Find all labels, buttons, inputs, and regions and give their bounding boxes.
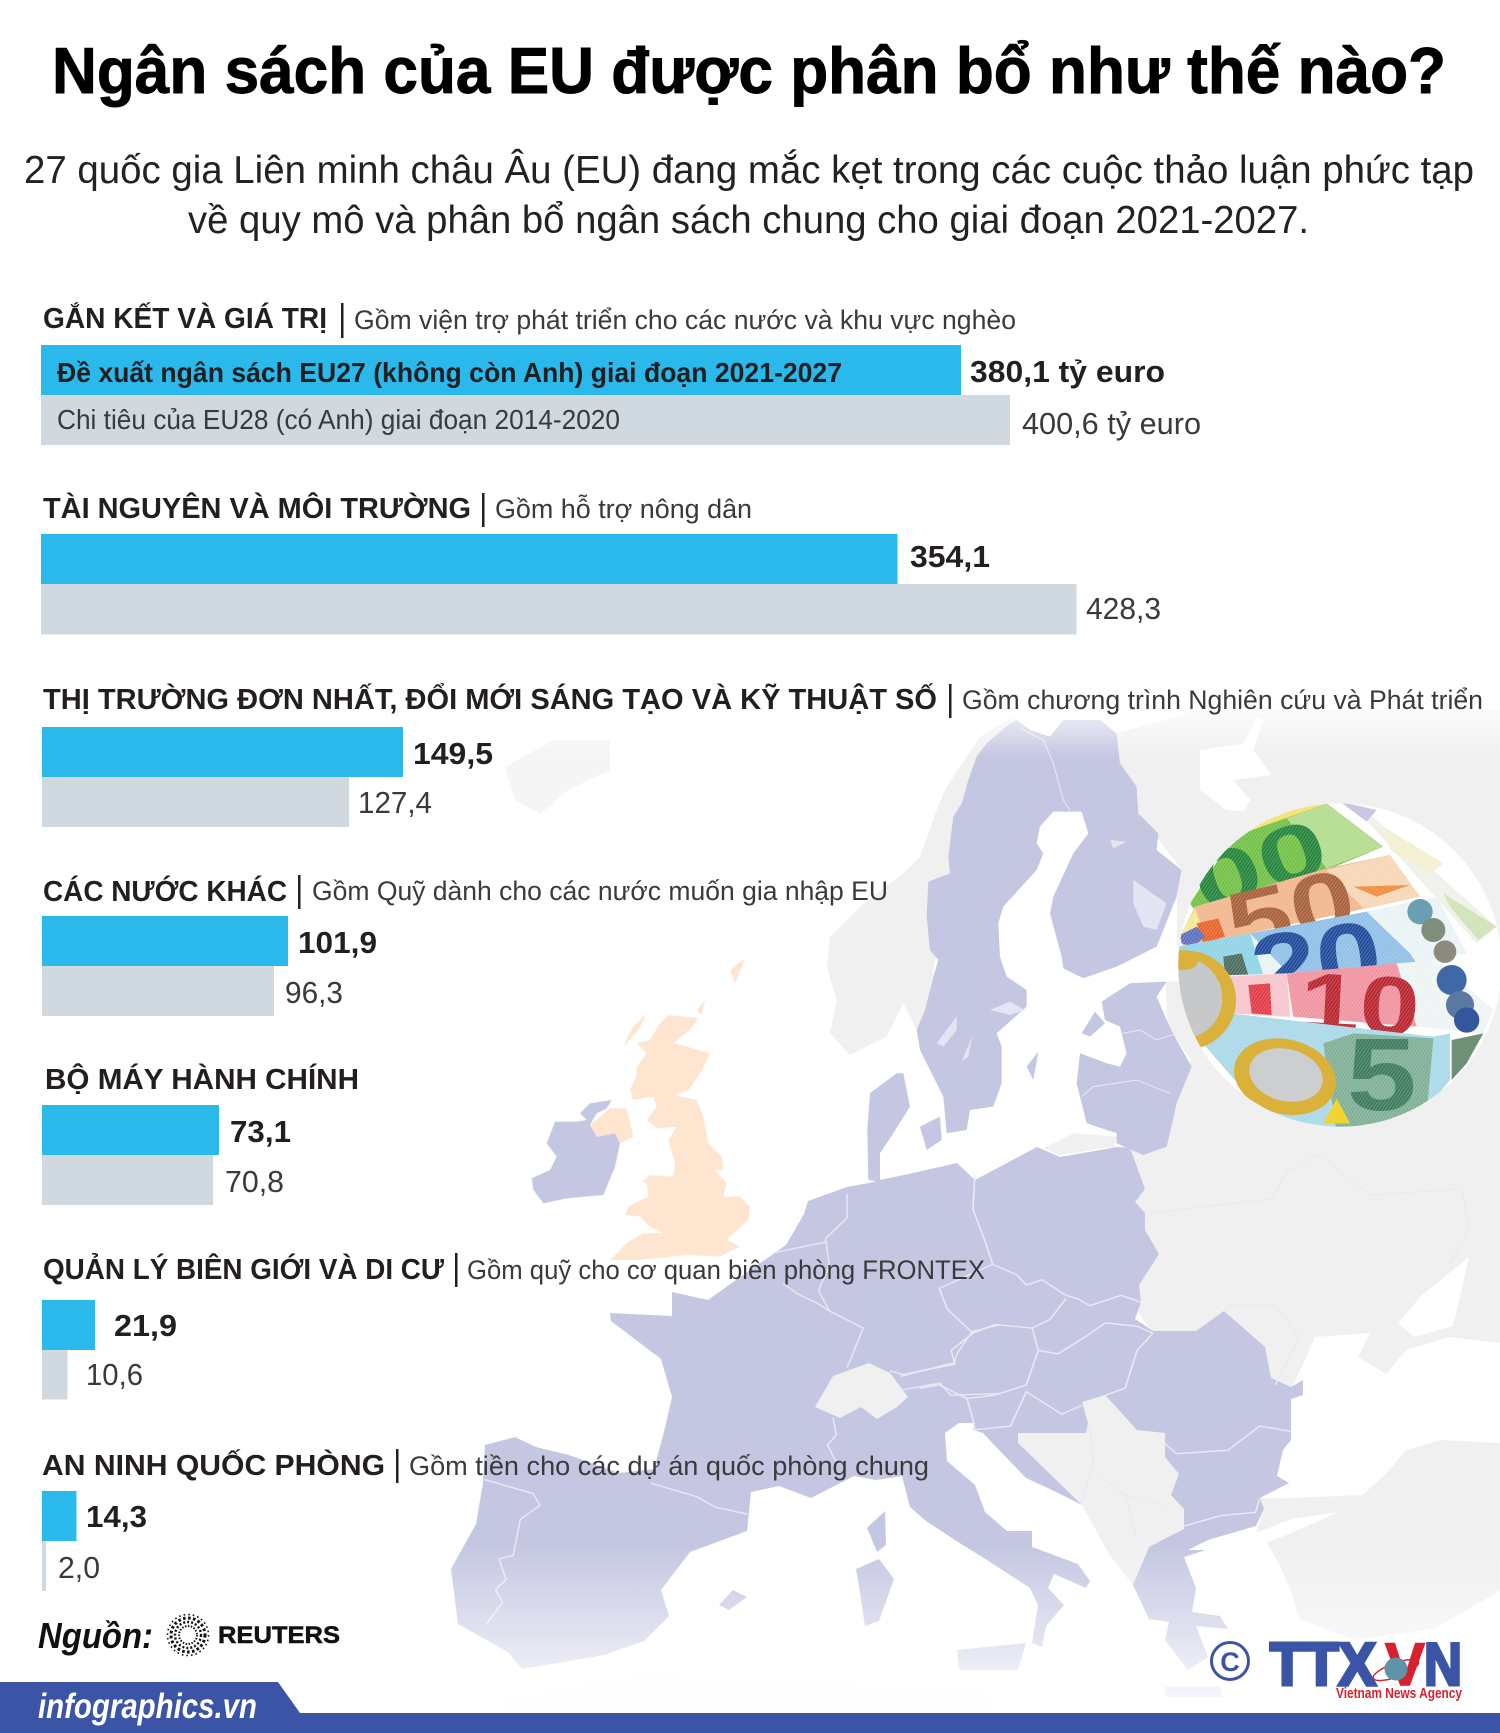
intro text: 27 quốc gia Liên minh châu Âu (EU) đang mắc kẹt trong các cuộc thảo luận phức tạp <box>24 149 1474 192</box>
icon: globe <box>1371 1655 1421 1685</box>
heading: BỘ MÁY HÀNH CHÍNH <box>45 1062 359 1096</box>
description: Gồm Quỹ dành cho các nước muốn gia nhập EU <box>312 876 888 906</box>
bar: EU27 <box>42 1300 95 1350</box>
EU: islands <box>719 1511 1221 1697</box>
bar: EU28 <box>42 966 274 1016</box>
icon: Reuters logo <box>168 1614 208 1656</box>
footer band <box>0 1682 1500 1733</box>
panel: cohesion and values <box>41 301 1201 445</box>
agency name: Vietnam News Agency <box>1336 1686 1462 1702</box>
value: 10,6: 10,6 <box>86 1357 143 1392</box>
legend: EU28: Chi tiêu của EU28 (có Anh) giai đoạn 2014-2020 <box>57 404 620 435</box>
illustration: euro banknotes and coins: 20 <box>1245 900 1388 1025</box>
value: 354,1: 354,1 <box>910 539 990 574</box>
bar: EU28 spending <box>41 395 1010 445</box>
description: Gồm quỹ cho cơ quan biên phòng FRONTEX <box>467 1255 985 1285</box>
description: Gồm tiền cho các dự án quốc phòng chung <box>409 1451 929 1481</box>
bar: EU28 <box>42 777 349 827</box>
EU: Baltic states and Denmark <box>867 982 1192 1182</box>
value: 127,4: 127,4 <box>358 785 432 820</box>
illustration: euro banknotes and coins: 10 <box>1297 955 1422 1054</box>
illustration: euro banknotes and coins: 00 <box>1180 801 1339 931</box>
value: 96,3: 96,3 <box>285 975 343 1010</box>
map of Europe <box>451 710 1500 1713</box>
source <box>38 1614 340 1656</box>
site name: infographics.vn <box>38 1687 257 1726</box>
non-EU countries <box>505 728 1500 1624</box>
value: 101,9: 101,9 <box>298 925 377 960</box>
heading: AN NINH QUỐC PHÒNG <box>42 1448 385 1482</box>
panel: single market <box>42 682 1483 827</box>
value: 400,6: 400,6 tỷ euro <box>1022 406 1201 441</box>
description: Gồm chương trình Nghiên cứu và Phát triển <box>962 685 1483 715</box>
illustration: euro banknotes and coins: 5 <box>1347 1016 1417 1132</box>
panel: other countries <box>42 874 888 1016</box>
panel: border management <box>42 1252 985 1400</box>
bar: EU27 <box>42 727 403 777</box>
bar: EU27 <box>42 1105 219 1155</box>
title: Ngân sách của EU được phân bổ như thế nào? <box>52 34 1446 107</box>
bar: EU28 <box>42 1541 46 1591</box>
value: 14,3: 14,3 <box>86 1499 147 1534</box>
heading: GẮN KẾT VÀ GIÁ TRỊ <box>43 301 327 335</box>
illustration: euro banknotes and coins <box>1178 804 1500 1127</box>
icon: copyright <box>1212 1642 1248 1680</box>
value: 2,0: 2,0 <box>58 1550 100 1585</box>
TTXVN logo: N <box>1424 1631 1462 1698</box>
heading: THỊ TRƯỜNG ĐƠN NHẤT, ĐỔI MỚI SÁNG TẠO VÀ KỸ THUẬT SỐ <box>43 682 937 716</box>
non-EU: Switzerland and western Balkans <box>815 1363 1184 1585</box>
heading: QUẢN LÝ BIÊN GIỚI VÀ DI CƯ <box>43 1252 445 1286</box>
source: Nguồn: <box>38 1615 153 1656</box>
value: 73,1: 73,1 <box>230 1114 291 1149</box>
icon: copyright: C <box>1220 1647 1240 1677</box>
legend: EU27: Đề xuất ngân sách EU27 (không còn Anh) giai đoạn 2021-2027 <box>57 357 842 388</box>
intro text: về quy mô và phân bổ ngân sách chung cho giai đoạn 2021-2027. <box>188 199 1309 242</box>
description: Gồm viện trợ phát triển cho các nước và khu vực nghèo <box>354 305 1016 335</box>
bar: EU28 <box>42 1350 68 1400</box>
description: Gồm hỗ trợ nông dân <box>495 493 752 524</box>
TTXVN logo <box>1212 1631 1462 1702</box>
value: 428,3: 428,3 <box>1086 591 1161 626</box>
bar: EU27 <box>42 1491 76 1541</box>
EU: continental Europe <box>451 1147 1303 1670</box>
bar: EU27 proposal <box>41 345 961 395</box>
Reuters wordmark: REUTERS <box>218 1622 340 1649</box>
intro text <box>24 149 1474 242</box>
bar: EU28 <box>42 1155 213 1205</box>
value: 380,1: 380,1 tỷ euro <box>970 354 1165 389</box>
bar: EU27 <box>41 534 898 584</box>
TTXVN logo: V <box>1385 1631 1425 1698</box>
bar: EU27 <box>42 916 288 966</box>
panel: resources and environment <box>41 491 1161 634</box>
illustration: euro banknotes and coins: 50 <box>1218 851 1364 974</box>
EU: Sweden and Finland <box>917 720 1182 1133</box>
panel: security and defence <box>42 1448 929 1591</box>
Ireland and UK <box>532 958 750 1260</box>
value: 70,8: 70,8 <box>225 1164 284 1199</box>
wordmark: TTX <box>1270 1631 1376 1698</box>
heading: TÀI NGUYÊN VÀ MÔI TRƯỜNG <box>43 491 471 525</box>
value: 21,9: 21,9 <box>114 1308 177 1343</box>
heading: CÁC NƯỚC KHÁC <box>43 874 287 908</box>
bar: EU28 <box>41 584 1076 634</box>
value: 149,5: 149,5 <box>413 736 493 771</box>
panel: administration <box>42 1062 359 1205</box>
